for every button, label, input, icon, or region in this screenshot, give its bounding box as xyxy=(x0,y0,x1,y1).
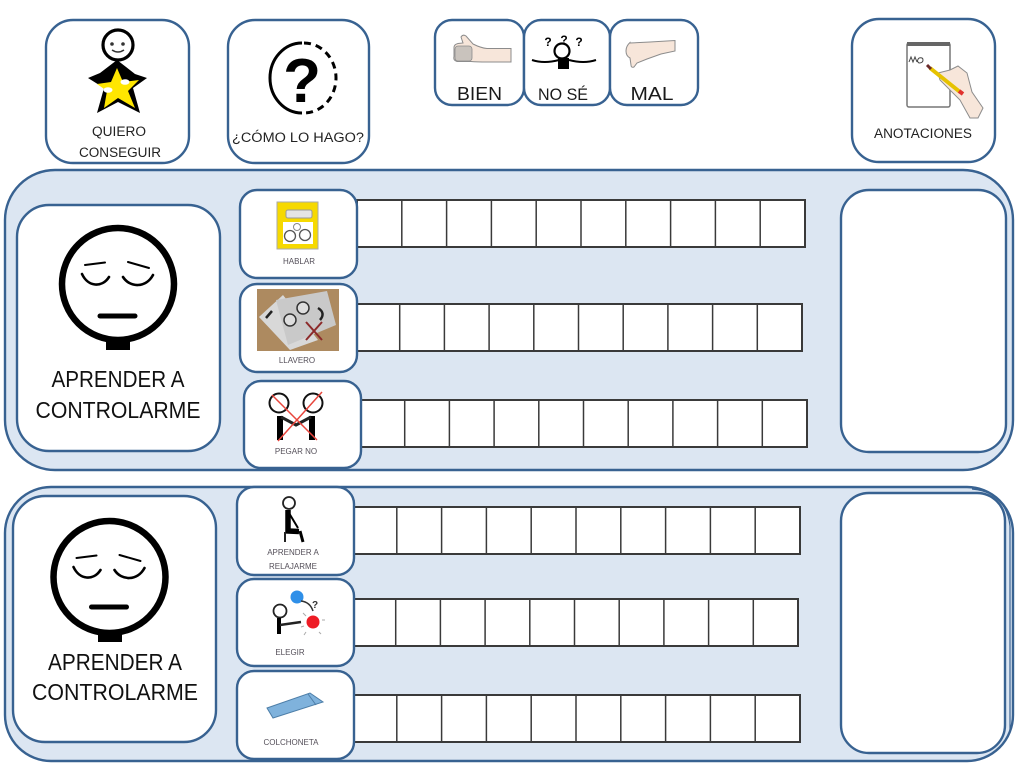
icon: hand writing on notepad xyxy=(907,42,983,118)
icon: calm face second xyxy=(54,521,166,642)
label: aprender a relajarme: RELAJARME xyxy=(269,562,317,571)
card: aprender a relajarme xyxy=(237,487,354,575)
card: goal aprender a controlarme second xyxy=(13,496,216,742)
label: goal text second xyxy=(32,649,198,705)
icon: shrugging figure with question marks: ? xyxy=(575,35,583,49)
label: colchoneta: COLCHONETA xyxy=(264,738,319,747)
icon: keyring photo xyxy=(257,289,339,351)
card: no se xyxy=(524,20,610,105)
card: hablar xyxy=(240,190,357,278)
icon: question mark in circle xyxy=(270,43,336,116)
label: aprender a relajarme xyxy=(267,548,319,571)
card: colchoneta xyxy=(237,671,354,759)
icon: shrugging figure with question marks: ? xyxy=(560,33,568,47)
icon: two figures hitting crossed out xyxy=(270,392,322,441)
label: llavero: LLAVERO xyxy=(279,356,315,365)
label: pegar no: PEGAR NO xyxy=(275,447,317,456)
tracking grid: row 1 xyxy=(357,200,805,247)
label: mal: MAL xyxy=(630,83,674,104)
card: quiero conseguir xyxy=(46,20,189,163)
label: quiero conseguir: CONSEGUIR xyxy=(79,145,161,160)
card: como lo hago xyxy=(228,20,369,163)
panel: first goal xyxy=(5,170,1013,470)
icon: shrugging figure with question marks: ? xyxy=(544,35,552,49)
panel: second goal xyxy=(5,487,1013,761)
label: no se: NO SÉ xyxy=(538,85,588,104)
label: goal text xyxy=(36,366,200,423)
label: goal text: APRENDER A xyxy=(52,366,185,392)
icon: seated figure xyxy=(283,497,303,542)
icon: yellow communication book xyxy=(277,202,318,249)
icon: calm face xyxy=(62,228,174,350)
label: quiero conseguir: QUIERO xyxy=(92,124,146,139)
icon: person holding star xyxy=(88,30,147,113)
card: goal aprender a controlarme xyxy=(17,205,220,451)
card: mal xyxy=(610,20,698,105)
label: quiero conseguir xyxy=(79,124,161,160)
icon: thumb down xyxy=(626,40,675,67)
label: anotaciones: ANOTACIONES xyxy=(874,126,972,141)
card: notes box one xyxy=(841,190,1006,452)
icon: thumb up xyxy=(454,35,511,62)
card: elegir xyxy=(237,579,354,666)
label: goal text: CONTROLARME xyxy=(36,397,200,423)
card: bien xyxy=(435,20,524,105)
label: elegir: ELEGIR xyxy=(275,648,305,657)
label: como lo hago: ¿CÓMO LO HAGO? xyxy=(232,130,364,145)
label: goal text second: CONTROLARME xyxy=(32,679,198,705)
tracking grid: row 3 xyxy=(360,400,807,447)
icon: figure choosing between colours: ? xyxy=(312,600,318,611)
card: anotaciones xyxy=(852,19,995,162)
outline: offset arc at top right of second panel xyxy=(972,489,1010,730)
tracking grid: row 6 xyxy=(352,695,800,742)
tracking grid: row 4 xyxy=(352,507,800,554)
icon: blue mat xyxy=(267,693,323,718)
card: notes box two xyxy=(841,493,1005,753)
label: goal text second: APRENDER A xyxy=(48,649,183,675)
label: bien: BIEN xyxy=(457,83,502,104)
tracking grid: row 2 xyxy=(355,304,802,351)
card: pegar no xyxy=(244,381,361,468)
icon: shrugging figure with question marks xyxy=(532,33,596,69)
card: llavero xyxy=(240,284,357,372)
tracking grid: row 5 xyxy=(351,599,798,646)
icon: question mark in circle: ? xyxy=(283,47,321,116)
label: hablar: HABLAR xyxy=(283,257,315,266)
label: aprender a relajarme: APRENDER A xyxy=(267,548,319,557)
